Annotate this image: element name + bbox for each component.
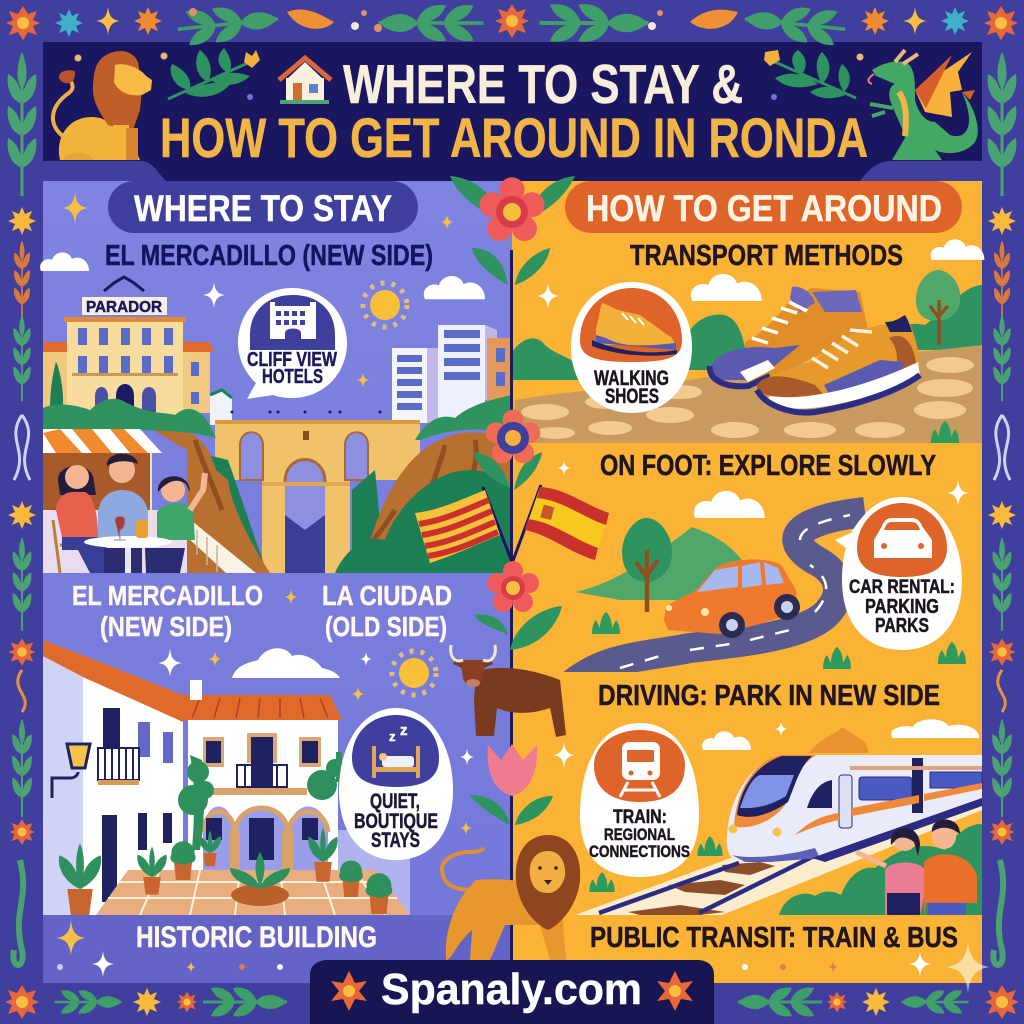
callout: cliff view hotels: HOTELS xyxy=(262,366,323,388)
band: public transit: PUBLIC TRANSIT: TRAIN & BUS xyxy=(590,922,958,954)
car xyxy=(664,559,800,638)
icon: bed: z xyxy=(389,729,396,744)
callout: train regional connections xyxy=(580,723,699,877)
mountain behind train xyxy=(809,727,869,753)
tiled courtyard xyxy=(96,870,410,915)
icon: catalan flag xyxy=(415,487,512,563)
left wing of building xyxy=(43,650,83,915)
icon: top flower xyxy=(450,176,575,285)
heading: driving: DRIVING: PARK IN NEW SIDE xyxy=(598,680,940,712)
central building xyxy=(188,720,338,870)
callout: quiet boutique stays: STAYS xyxy=(371,829,420,852)
callout: train regional connections: REGIONAL xyxy=(604,825,675,844)
scene: train and tracks xyxy=(553,719,982,915)
potted plants xyxy=(59,752,392,915)
icon: lion on banner xyxy=(53,51,253,160)
subheading: transport methods: TRANSPORT METHODS xyxy=(630,240,903,272)
callout: train regional connections: TRAIN: xyxy=(613,807,667,828)
scene: walking shoes on cobblestones xyxy=(512,239,984,443)
scene: parador and ronda bridge xyxy=(43,277,512,573)
callout: quiet boutique stays: QUIET, xyxy=(370,790,420,813)
subheading: el mercadillo: EL MERCADILLO (NEW SIDE) xyxy=(105,240,433,272)
icon: left laurel branch xyxy=(168,48,260,99)
callout: walking shoes: WALKING xyxy=(594,367,669,390)
border ornaments bottom xyxy=(54,988,969,1016)
icon: right laurel branch xyxy=(764,50,864,100)
website badge xyxy=(310,960,714,1024)
band: historic building xyxy=(43,915,512,983)
pill heading: where to stay xyxy=(108,181,418,233)
panel: how to get around xyxy=(512,181,982,983)
icon: badge flower left xyxy=(331,971,367,1011)
tracks xyxy=(575,803,982,915)
green hedge and cliff left xyxy=(187,450,267,573)
title xyxy=(160,53,868,169)
callout: car rental: PARKING xyxy=(865,596,939,618)
cafe terrace xyxy=(43,429,256,573)
sun upper xyxy=(363,283,407,327)
green and cliff right xyxy=(352,470,385,573)
panel: title banner xyxy=(43,42,982,182)
band: public transit xyxy=(590,922,990,993)
title: WHERE TO STAY & xyxy=(343,53,743,115)
text block: neighbourhood labels: LA CIUDAD xyxy=(322,580,452,611)
callout: quiet boutique stays: BOUTIQUE xyxy=(354,810,438,833)
border ornaments top xyxy=(6,1,1018,47)
text block: neighbourhood labels: (NEW SIDE) xyxy=(100,611,232,642)
callout: train regional connections: CONNECTIONS xyxy=(589,842,690,861)
band: historic building: HISTORIC BUILDING xyxy=(136,921,377,954)
train xyxy=(727,755,982,862)
icon: train xyxy=(594,730,685,802)
icon: bed: z xyxy=(400,722,408,739)
icon: middle flower xyxy=(474,410,542,490)
parador building xyxy=(43,277,232,425)
callout: cliff view hotels: CLIFF VIEW xyxy=(247,349,337,371)
icon: badge flower right xyxy=(657,971,693,1011)
callout: cliff view hotels xyxy=(238,288,347,399)
icon: spanish flag xyxy=(511,485,609,566)
callout: car rental xyxy=(835,497,962,650)
icon: bed xyxy=(374,722,418,778)
decorations sky left xyxy=(40,192,485,388)
callout: walking shoes: SHOES xyxy=(605,385,659,408)
icon: lion standing xyxy=(442,835,580,960)
icon: shoe xyxy=(580,288,682,362)
callout: quiet boutique stays xyxy=(339,708,453,860)
pill heading: where to stay: WHERE TO STAY xyxy=(134,188,392,229)
parador building: PARADOR xyxy=(86,299,162,316)
shoe front xyxy=(757,315,920,413)
border ornaments left xyxy=(5,52,39,1019)
icon: hotel xyxy=(250,295,335,350)
icon: bull xyxy=(451,645,566,737)
text block: neighbourhood labels: (OLD SIDE) xyxy=(325,611,447,642)
bridge xyxy=(215,410,420,573)
icon: house xyxy=(279,58,331,104)
callout: walking shoes xyxy=(571,282,692,413)
scene: driving road xyxy=(557,460,969,695)
center divider with flowers xyxy=(442,176,580,970)
text block: neighbourhood labels: EL MERCADILLO xyxy=(72,580,263,611)
callout: car rental: PARKS xyxy=(875,615,929,637)
border ornaments right xyxy=(985,52,1019,1019)
sun lower xyxy=(392,651,436,695)
icon: tulip xyxy=(470,744,553,825)
tree on road xyxy=(622,518,672,612)
people xyxy=(856,820,977,915)
icon: dragon xyxy=(868,50,978,160)
icon: street lamp xyxy=(52,744,90,798)
modern buildings xyxy=(392,325,512,425)
icon: car xyxy=(857,503,947,577)
scene: la ciudad courtyard xyxy=(43,640,474,915)
callout: car rental: CAR RENTAL: xyxy=(849,577,955,598)
shoe back xyxy=(710,287,868,386)
website badge: Spanaly.com xyxy=(381,965,642,1014)
panel: where to stay xyxy=(43,181,512,983)
text block: neighbourhood labels xyxy=(72,580,452,642)
people at cafe xyxy=(56,454,205,573)
bushes xyxy=(779,891,859,915)
heading: on foot: ON FOOT: EXPLORE SLOWLY xyxy=(600,450,936,482)
pill heading: how to get around: HOW TO GET AROUND xyxy=(586,188,942,229)
icon: flower at label band xyxy=(474,561,562,650)
tree on right xyxy=(916,270,960,345)
